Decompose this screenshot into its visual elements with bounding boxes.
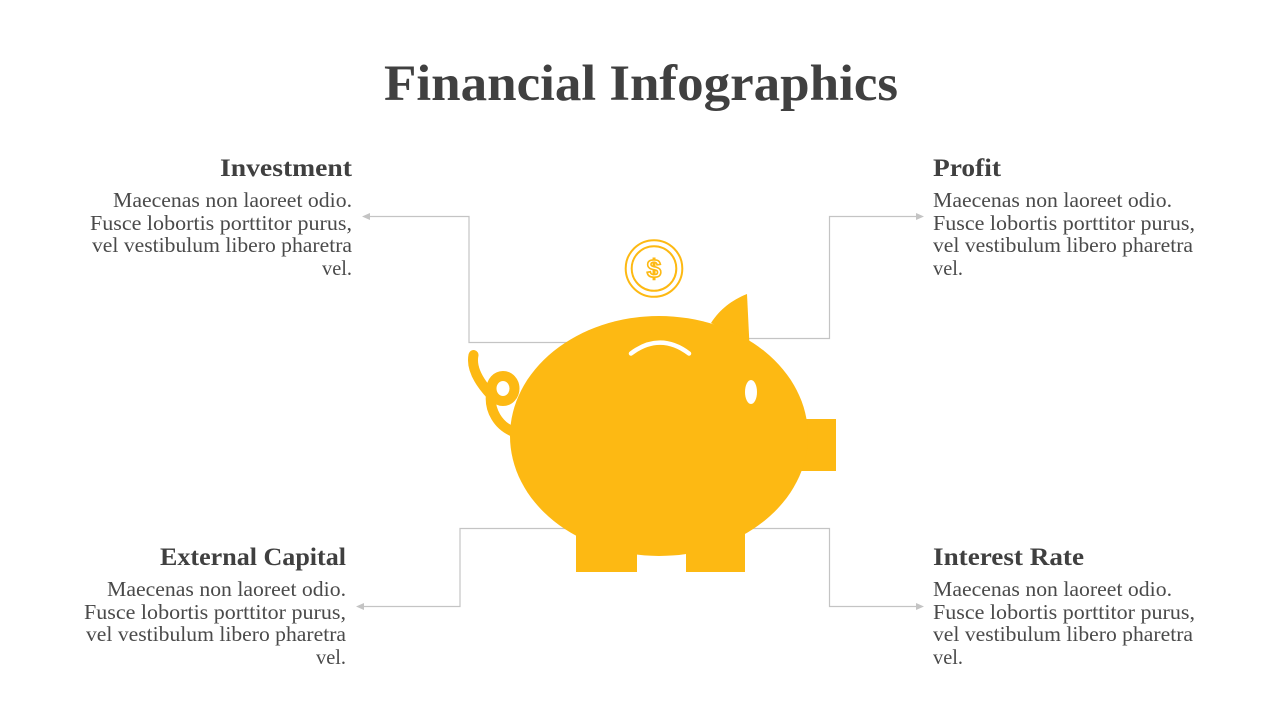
text block: external capital: vel vestibulum libero pharetra xyxy=(86,622,346,646)
text block: investment xyxy=(90,153,353,280)
text block: external capital: vel. xyxy=(316,645,346,669)
text block: profit: Maecenas non laoreet odio. xyxy=(933,188,1172,212)
text block: investment: vel. xyxy=(322,256,352,280)
text block: profit xyxy=(933,153,1195,280)
text block: interest rate: vel. xyxy=(933,645,963,669)
text block: profit: Profit xyxy=(933,153,1002,182)
text block: investment: vel vestibulum libero pharetra xyxy=(92,233,352,257)
text block: interest rate: Fusce lobortis porttitor purus, xyxy=(933,600,1195,624)
arrow: profit connector xyxy=(745,213,924,338)
text block: external capital xyxy=(84,542,346,669)
pig tail xyxy=(473,355,514,432)
text block: profit: vel vestibulum libero pharetra xyxy=(933,233,1193,257)
text block: interest rate: Maecenas non laoreet odio. xyxy=(933,577,1172,601)
text block: interest rate: Interest Rate xyxy=(933,542,1084,571)
arrow: investment connector xyxy=(362,213,570,342)
text block: external capital: Maecenas non laoreet odio. xyxy=(107,577,346,601)
text block: profit: vel. xyxy=(933,256,963,280)
icon: piggy bank xyxy=(473,294,836,572)
text block: external capital: Fusce lobortis porttitor purus, xyxy=(84,600,346,624)
title: Financial Infographics xyxy=(384,56,898,112)
text block: interest rate xyxy=(933,542,1195,669)
icon: coin: $ xyxy=(647,254,662,284)
pig front leg xyxy=(686,525,745,572)
pig snout xyxy=(795,419,836,471)
text block: interest rate: vel vestibulum libero pharetra xyxy=(933,622,1193,646)
text block: profit: Fusce lobortis porttitor purus, xyxy=(933,211,1195,235)
pig body xyxy=(510,316,808,556)
text block: investment: Fusce lobortis porttitor purus, xyxy=(90,211,352,235)
pig eye xyxy=(745,380,757,404)
text block: investment: Investment xyxy=(220,153,353,182)
text block: external capital: External Capital xyxy=(160,542,346,571)
text block: investment: Maecenas non laoreet odio. xyxy=(113,188,352,212)
pig back leg xyxy=(576,525,637,572)
pig coin slot xyxy=(631,343,689,354)
arrow: interest rate connector xyxy=(740,528,924,610)
arrow: external capital connector xyxy=(356,528,580,610)
icon: coin xyxy=(626,240,682,297)
pig ear xyxy=(711,294,750,345)
